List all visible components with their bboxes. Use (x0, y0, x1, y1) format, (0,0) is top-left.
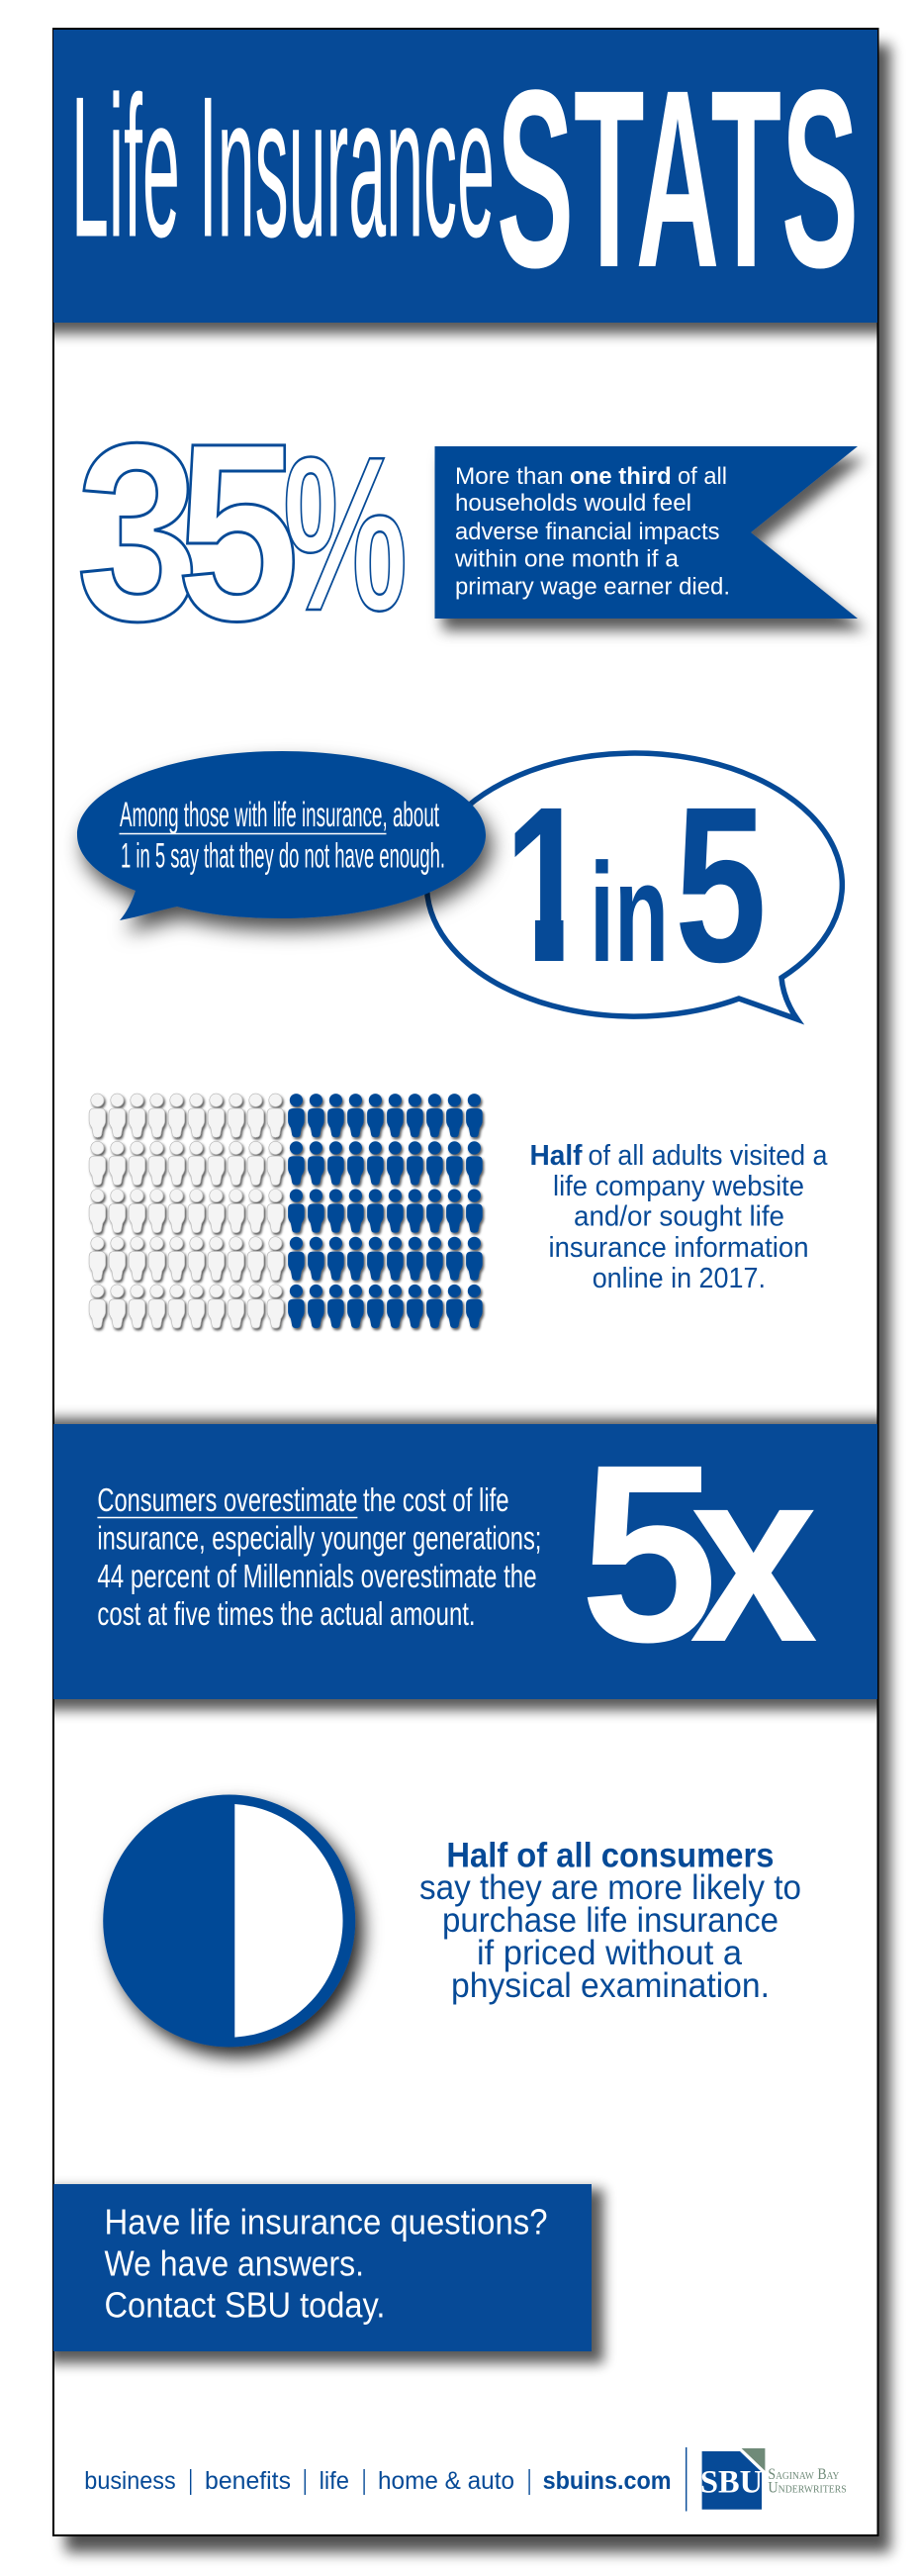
text: half of adults: life company website (553, 1171, 804, 1202)
band text (97, 1481, 541, 1632)
band text: Consumers overestimate (97, 1481, 357, 1518)
band text: the cost of life (363, 1481, 509, 1518)
band text: 44 percent of Millennials overestimate the (97, 1558, 537, 1594)
outline speech bubble with 1 in 5 (426, 753, 842, 1019)
stat: 35 percent outline number: % (283, 412, 408, 657)
footer navigation links: benefits (205, 2467, 291, 2495)
stat: 1 in 5: in (590, 834, 669, 992)
logo: Saginaw Bay Underwriters: SBU (700, 2464, 763, 2500)
band text: insurance, especially younger generations; (97, 1520, 541, 1557)
call to action text: We have answers. (105, 2242, 364, 2283)
footer navigation links: business (84, 2467, 176, 2495)
stat: 5x: 5 (580, 1412, 718, 1695)
footer navigation links: home & auto (378, 2467, 514, 2495)
bubble text: Among those with life insurance, about (120, 796, 439, 834)
stat: 5x (580, 1412, 818, 1695)
text: half of consumers: purchase life insurance (442, 1901, 779, 1940)
ribbon text: More than (455, 463, 564, 490)
ribbon text: households would feel (455, 490, 691, 517)
pictogram: 100 people, half blue (89, 1094, 483, 1328)
logo: Saginaw Bay Underwriters: Saginaw Bay (768, 2466, 839, 2483)
text: half of adults: insurance information (548, 1232, 809, 1264)
text: half of consumers: Half of all consumers (446, 1837, 774, 1875)
stat: 1 in 5 (495, 761, 767, 1008)
call to action text (105, 2202, 548, 2325)
panel: title banner (40, 30, 890, 334)
text: half of adults: Half (530, 1140, 583, 1172)
text: half of adults: and/or sought life (574, 1201, 784, 1233)
stat: 35 percent outline number: 3 (76, 391, 200, 674)
text: half of adults: online in 2017. (593, 1263, 766, 1294)
panel: call to action (47, 2184, 603, 2363)
logo: Saginaw Bay Underwriters (700, 2448, 847, 2510)
text: half of adults (530, 1140, 828, 1294)
text: half of consumers: physical examination. (451, 1966, 770, 2005)
text: half of consumers: if priced without a (477, 1934, 743, 1972)
ribbon text: within one month if a (454, 546, 680, 572)
text: half of adults: of all adults visited a (588, 1140, 828, 1172)
ribbon text: primary wage earner died. (455, 574, 730, 600)
text: half of consumers: say they are more likely to (419, 1868, 801, 1907)
footer navigation links: sbuins.com (543, 2467, 672, 2495)
panel: ribbon callout (435, 446, 858, 619)
stat: 1 in 5: 5 (675, 761, 767, 1008)
stat: 35 percent outline number: 5 (176, 391, 300, 674)
stat: 5x: x (689, 1417, 818, 1693)
stat: 35 percent outline number (76, 391, 408, 674)
call to action text: Contact SBU today. (105, 2284, 386, 2325)
ribbon text: of all (678, 463, 727, 490)
call to action text: Have life insurance questions? (105, 2202, 548, 2242)
ribbon text: adverse financial impacts (455, 519, 720, 545)
bubble text (119, 796, 445, 875)
footer navigation links: life (320, 2467, 349, 2495)
half-filled circle chart (103, 1795, 355, 2047)
footer navigation links (84, 2447, 687, 2512)
logo: Saginaw Bay Underwriters: Underwriters (768, 2479, 847, 2496)
solid speech bubble (77, 751, 486, 920)
stat: 1 in 5: 1 (504, 761, 590, 1008)
panel: 5x band (40, 1412, 890, 1710)
text: half of consumers (419, 1837, 801, 2005)
bubble text: 1 in 5 say that they do not have enough. (121, 837, 445, 875)
ribbon text: one third (570, 463, 672, 490)
ribbon text (454, 463, 730, 600)
band text: cost at five times the actual amount. (97, 1595, 476, 1632)
